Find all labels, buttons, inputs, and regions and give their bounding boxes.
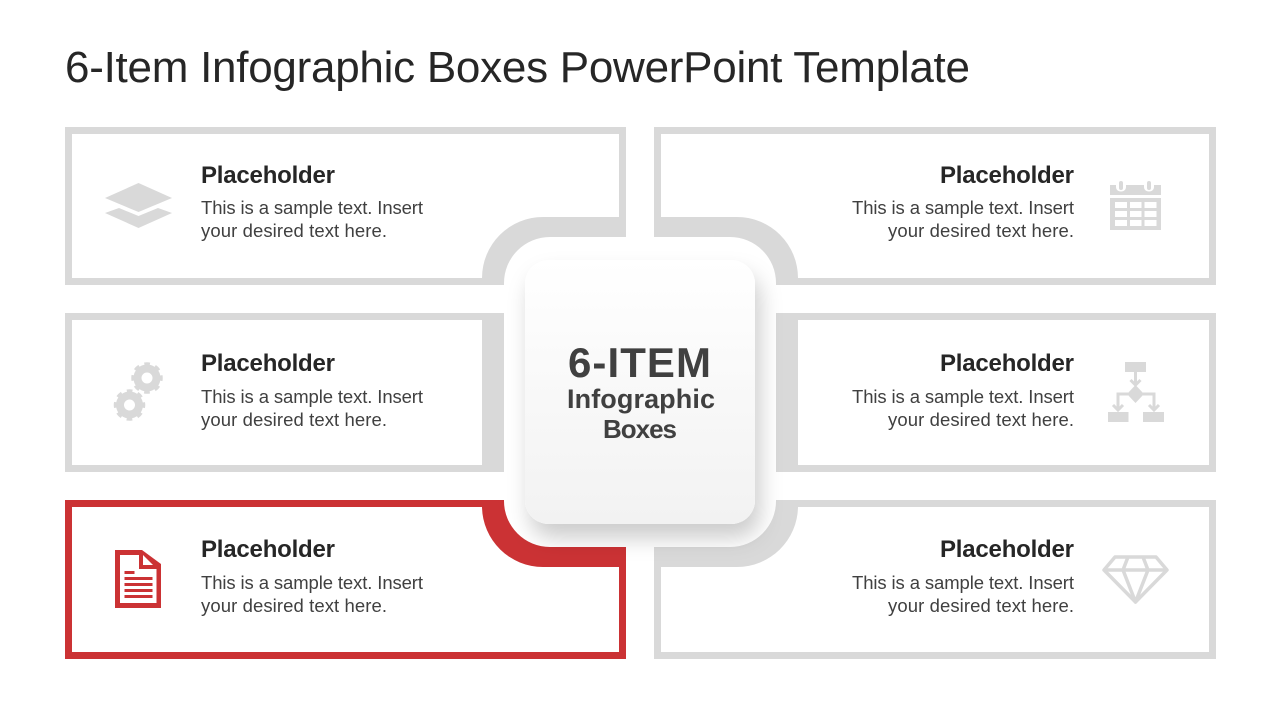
text: middle right: Placeholder [940, 350, 1074, 377]
text: middle right: This is a sample text. Insert [852, 386, 1074, 407]
icon: layers [105, 183, 172, 228]
card subheading: Boxes [603, 414, 677, 444]
text: bottom right: This is a sample text. Insert [852, 572, 1074, 593]
panel: bottom right [654, 500, 1216, 659]
title: 6-Item Infographic Boxes PowerPoint Template [65, 43, 970, 92]
card heading: 6-ITEM [568, 339, 711, 386]
text: bottom right [852, 536, 1074, 616]
text: middle right: your desired text here. [888, 409, 1074, 430]
text: middle left: Placeholder [201, 350, 335, 377]
text: top left: your desired text here. [201, 220, 387, 241]
text: middle right [852, 350, 1074, 430]
text: bottom left: your desired text here. [201, 595, 387, 616]
panel: top right [654, 127, 1216, 285]
icon: gears [116, 364, 161, 419]
icon: calendar [1110, 181, 1161, 230]
text: bottom left: This is a sample text. Insert [201, 572, 423, 593]
text: top right: This is a sample text. Insert [852, 197, 1074, 218]
text: middle left: This is a sample text. Insert [201, 386, 423, 407]
icon: diamond [1104, 557, 1167, 602]
panel: top left [65, 127, 626, 285]
panel: middle left [65, 313, 504, 472]
icon: document [115, 550, 161, 608]
text: bottom right: Placeholder [940, 536, 1074, 563]
panel: middle right [776, 313, 1216, 472]
text: top left [201, 162, 423, 241]
card subheading [567, 384, 715, 444]
central card [525, 260, 755, 524]
text: middle left [201, 350, 423, 430]
text: top right: your desired text here. [888, 220, 1074, 241]
text: top right: Placeholder [940, 162, 1074, 189]
panel: bottom left highlighted [65, 500, 626, 659]
card subheading: Infographic [567, 384, 715, 414]
text: middle left: your desired text here. [201, 409, 387, 430]
text: bottom left: Placeholder [201, 536, 335, 563]
text: bottom left [201, 536, 423, 616]
text: bottom right: your desired text here. [888, 595, 1074, 616]
icon: flowchart [1108, 362, 1164, 422]
text: top right [852, 162, 1074, 241]
text: top left: Placeholder [201, 162, 335, 189]
text: top left: This is a sample text. Insert [201, 197, 423, 218]
